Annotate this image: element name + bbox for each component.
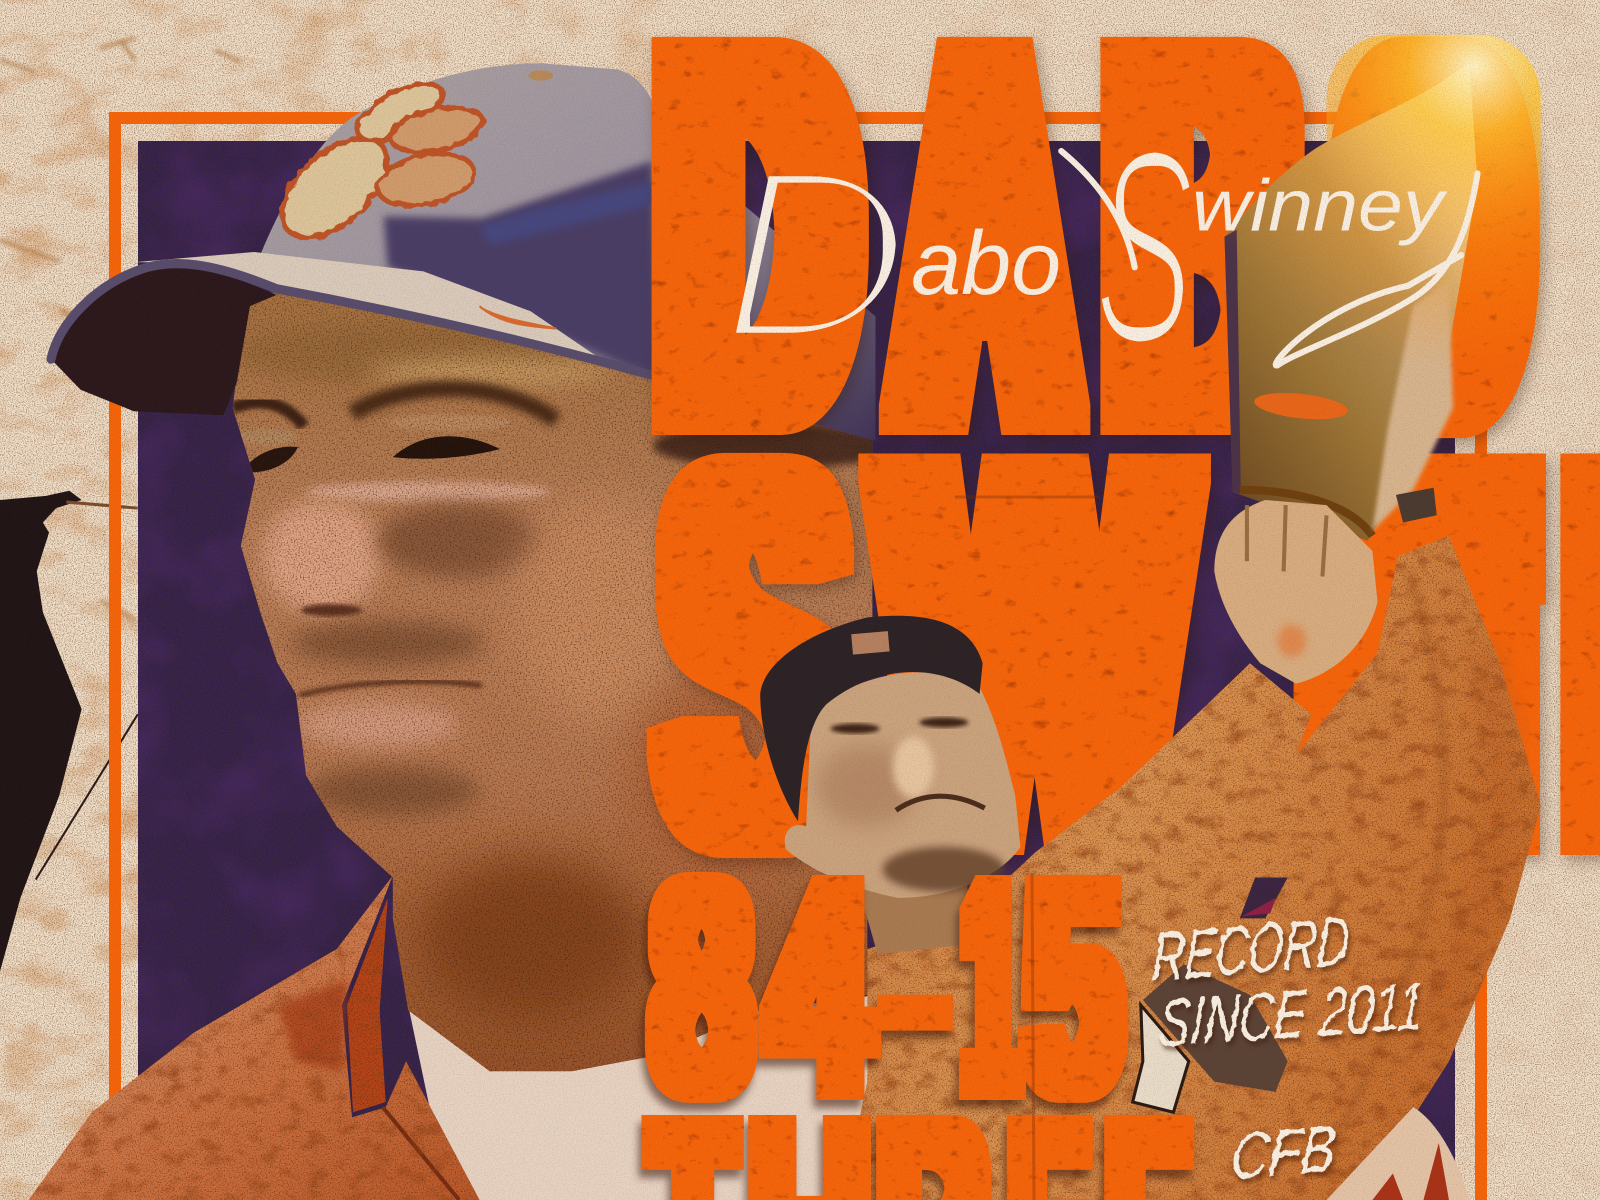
caption: record since 2011 xyxy=(1150,900,1427,1062)
stat: 84-15: 8 xyxy=(651,822,752,1152)
heading line: SWINNEY: I xyxy=(1248,351,1554,955)
sleeve of second figure xyxy=(1327,1107,1469,1200)
undershirt xyxy=(408,995,878,1200)
frame: orange border and purple panel xyxy=(115,118,1481,1200)
heading line: SWINNEY xyxy=(644,452,1600,870)
trophy glow xyxy=(1236,34,1541,350)
big portrait of coach xyxy=(29,63,898,1200)
letter creases xyxy=(955,497,1100,1200)
torn black edge xyxy=(0,491,138,971)
brim xyxy=(51,260,277,415)
stat: 84-15: 4 xyxy=(768,823,870,1153)
caption: record since 2011: SINCE 2011 xyxy=(1156,968,1427,1062)
trophy xyxy=(1224,61,1478,541)
chest logo xyxy=(1133,964,1288,1112)
signature flourish xyxy=(1061,151,1478,365)
signature: S xyxy=(1094,94,1195,401)
stat: 84-15: 1 xyxy=(965,823,1017,1152)
stat: 84-15 xyxy=(651,822,1121,1153)
paw logo xyxy=(264,72,487,256)
signature: abo xyxy=(911,214,1061,314)
smaller coach raising trophy xyxy=(760,61,1541,1200)
heading line: DABO xyxy=(662,0,1521,534)
signature xyxy=(719,94,1478,401)
shirt xyxy=(29,876,480,1200)
signature: winney xyxy=(1192,165,1448,247)
face xyxy=(232,292,872,1072)
heading line: SWINNEY: S xyxy=(667,358,841,951)
hands xyxy=(1214,281,1453,684)
cap with paw logo xyxy=(51,63,876,441)
jacket and arm xyxy=(842,536,1541,1200)
stat: 84-15: - xyxy=(881,937,949,1068)
signature: D xyxy=(719,118,910,392)
heading line: SWINNEY: W xyxy=(886,351,1186,955)
caption: record since 2011: RECORD xyxy=(1150,900,1352,997)
small face and cap xyxy=(760,616,1020,954)
caption: CFB: CFB xyxy=(1228,1111,1339,1194)
stat: THREE xyxy=(633,1115,1196,1200)
stat: 84-15: 5 xyxy=(1024,823,1121,1152)
jacket tear showing purple xyxy=(1240,878,1288,918)
